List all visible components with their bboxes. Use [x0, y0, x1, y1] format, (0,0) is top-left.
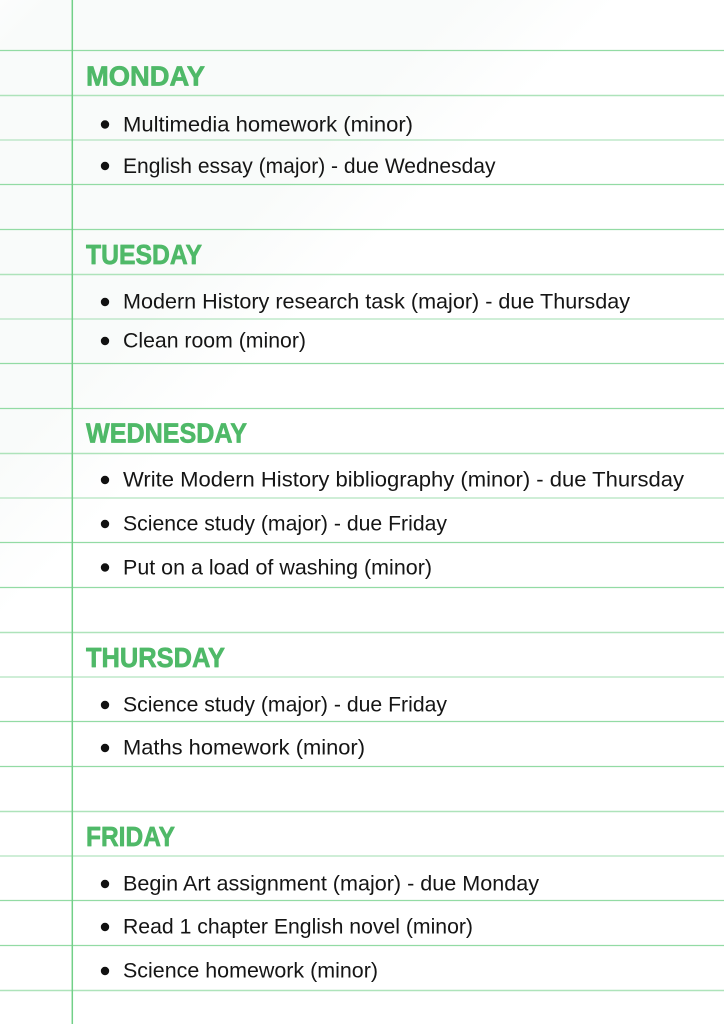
heading: Thursday: THURSDAY [86, 642, 225, 673]
panel: Wednesday [86, 418, 684, 579]
panel: Thursday [86, 642, 447, 760]
list item: Maths homework: Maths homework (minor) [123, 736, 365, 760]
list item: Science homework: Science homework (minor) [123, 959, 378, 983]
heading: Tuesday: TUESDAY [86, 239, 202, 270]
list item: Clean room: Clean room (minor) [123, 329, 306, 353]
margin line [71, 0, 73, 1024]
list item: Art assignment: Begin Art assignment (major) - due Monday [123, 872, 539, 896]
list item: English novel: Read 1 chapter English novel (minor) [123, 915, 473, 939]
list item: Modern History research task: Modern History research task (major) - due Thursday [123, 290, 630, 314]
panel: Monday [86, 60, 496, 178]
list item: Multimedia homework: Multimedia homework (minor) [123, 112, 413, 136]
heading: Wednesday: WEDNESDAY [86, 418, 247, 448]
list item: English essay: English essay (major) - due Wednesday [123, 154, 496, 178]
background diagonal tint [0, 0, 620, 620]
list item: Science study: Science study (major) - due Friday [123, 693, 447, 717]
list item: Load of washing: Put on a load of washing (minor) [123, 555, 432, 579]
heading: Monday: MONDAY [86, 60, 205, 92]
list item: Science study: Science study (major) - due Friday [123, 512, 447, 536]
list item: Modern History bibliography: Write Modern History bibliography (minor) - due Thursday [123, 468, 684, 492]
panel: Tuesday [86, 239, 630, 353]
heading: Friday: FRIDAY [86, 821, 175, 852]
panel: Friday [86, 821, 539, 983]
